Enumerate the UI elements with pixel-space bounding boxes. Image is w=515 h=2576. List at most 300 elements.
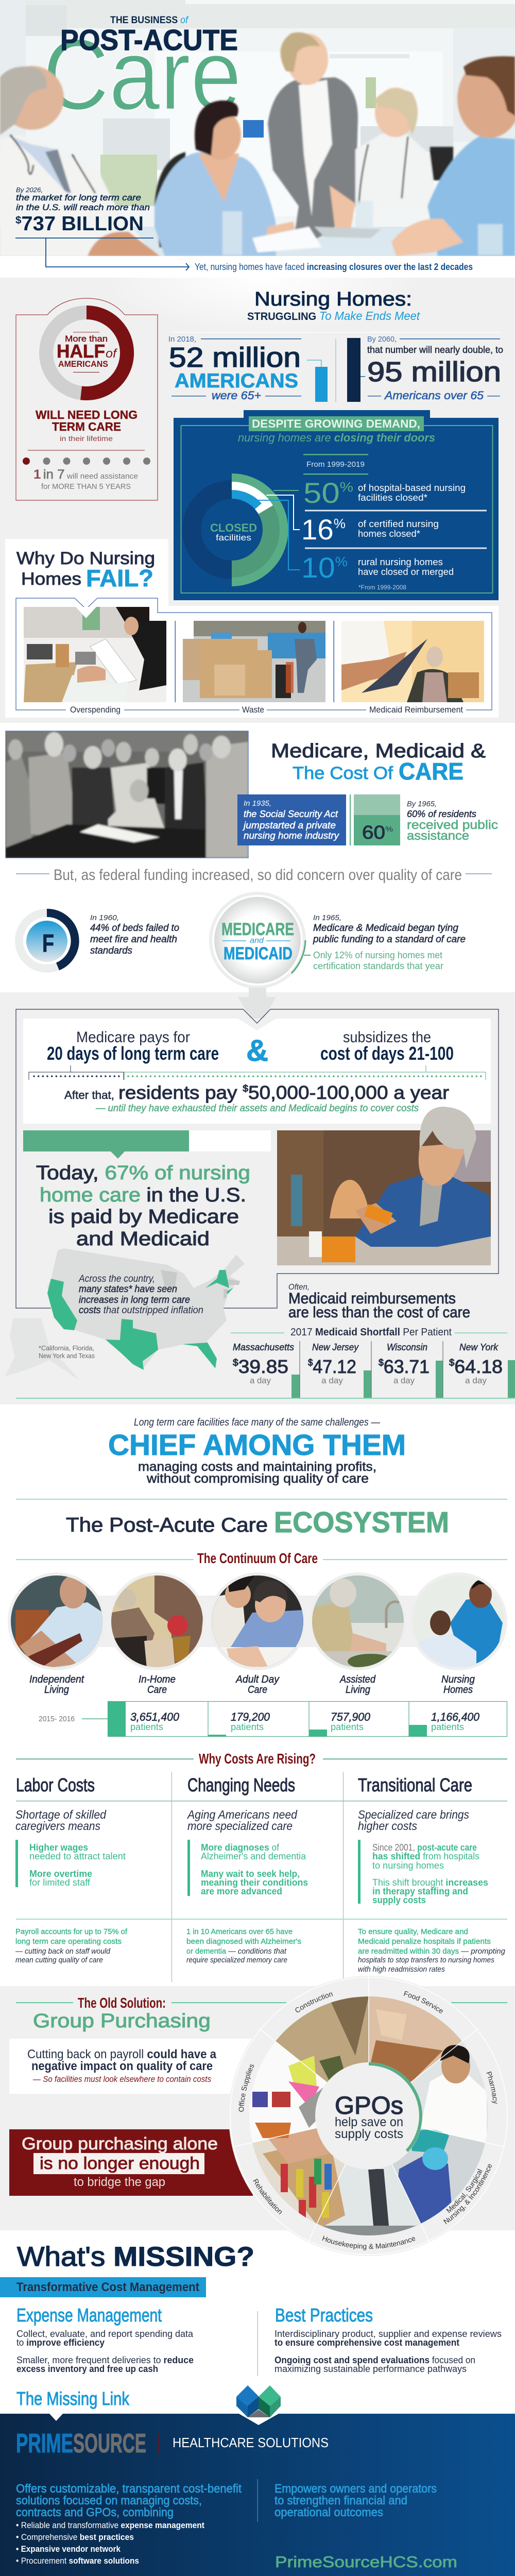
text: 1960 beds failed: meet fire and health bbox=[90, 934, 177, 945]
column: expense management: Expense Management bbox=[16, 2304, 162, 2326]
heading: why fail: Why Do Nursing bbox=[16, 549, 155, 568]
panel background and frame bbox=[174, 410, 499, 600]
frame line with callout notch bbox=[16, 598, 492, 710]
column: transitional care: This shift brought increases bbox=[372, 1877, 488, 1888]
column: expense management: to improve efficiency bbox=[16, 2337, 105, 2348]
Massachusetts: 39.85 bbox=[238, 1356, 288, 1377]
stat: 52 million in 2018: AMERICANS bbox=[175, 370, 298, 392]
column: changing needs: or dementia — conditions that bbox=[186, 1947, 287, 1956]
column: labor costs: caregivers means bbox=[15, 1819, 100, 1833]
column: changing needs: more specialized care bbox=[187, 1819, 293, 1833]
heading: why costs are rising: Why Costs Are Rising? bbox=[199, 1751, 316, 1767]
banner: despite growing demand bbox=[238, 416, 435, 446]
badge: Medicare and Medicaid: MEDICAID bbox=[224, 944, 293, 963]
text: 1960 beds failed: In 1960, bbox=[90, 913, 119, 922]
text: 20 days: Medicare pays for bbox=[76, 1029, 190, 1046]
labels: Overspending bbox=[70, 705, 121, 715]
text: 1960 beds failed: 44% of beds failed to bbox=[90, 923, 179, 934]
table: patients 2015-2016: 3,651,400 bbox=[130, 1710, 180, 1723]
text: empowers bbox=[274, 2482, 437, 2519]
wedge labels bbox=[239, 1991, 497, 2250]
stat: 95 million by 2060: By 2060, bbox=[367, 335, 397, 344]
wedge labels: Construction bbox=[296, 1993, 333, 2012]
column: best practices: maximizing sustainable performance pathways bbox=[274, 2364, 467, 2374]
list: offerings bbox=[16, 2520, 204, 2566]
photo: waste bbox=[183, 621, 325, 702]
text: costs outstripped inflation: Across the country, bbox=[78, 1274, 155, 1284]
text: empowers: operational outcomes bbox=[274, 2505, 383, 2519]
banner: despite growing demand: nursing homes are closing their doors bbox=[238, 431, 435, 444]
chart: 60 percent bar bbox=[350, 794, 400, 845]
wedge labels: Housekeeping & Maintenance bbox=[322, 2236, 415, 2250]
text: 20 days: 20 days of long term care bbox=[47, 1043, 219, 1064]
footnote: states: New York and Texas bbox=[39, 1352, 95, 1360]
column: changing needs: require specialized memory care bbox=[186, 1956, 287, 1964]
column: transitional care bbox=[358, 1774, 506, 1974]
panel: why do nursing homes fail bbox=[5, 539, 499, 718]
heading: Nursing Homes struggling: STRUGGLING To Make Ends Meet bbox=[247, 309, 421, 323]
heading: why fail bbox=[16, 549, 155, 591]
icon: F grade gauge: F bbox=[42, 930, 54, 957]
text: residents pay: residents pay bbox=[118, 1082, 229, 1103]
heading: Medicare, Medicaid and the cost of care: The Cost Of bbox=[293, 764, 393, 783]
text: will need long term care: WILL NEED LONG bbox=[36, 408, 138, 421]
stat: 50 percent: 50 bbox=[303, 477, 335, 509]
New York: New York bbox=[459, 1342, 499, 1352]
logo: PrimeSource wordmark: PRIME bbox=[16, 2429, 73, 2459]
circle photo: in-home care bbox=[108, 1572, 206, 1670]
text: Medicaid reimbursements bbox=[288, 1283, 470, 1321]
text: will need long term care: in their lifetime bbox=[60, 434, 113, 443]
circle photo: independent living bbox=[8, 1572, 106, 1670]
radial chart: closed facilities bbox=[182, 473, 300, 586]
column: expense management: Smaller, more frequent deliveries to reduce bbox=[16, 2355, 194, 2365]
stat: 10 percent: have closed or merged bbox=[358, 567, 454, 577]
chart: 67 percent bar bbox=[23, 1130, 271, 1159]
column: changing needs: are more advanced bbox=[201, 1886, 282, 1896]
chart: 60 percent bar: % bbox=[385, 825, 393, 834]
panel: half of Americans bbox=[16, 298, 158, 500]
text: will need long term care bbox=[28, 408, 145, 451]
column: transitional care: has shifted from hospitals bbox=[372, 1851, 479, 1861]
text: 20 days bbox=[47, 1029, 219, 1064]
text: empowers: Empowers owners and operators bbox=[274, 2482, 437, 2495]
table: patients 2015-2016: 2015- 2016 bbox=[39, 1715, 75, 1723]
grey section background: cost of long term care bbox=[0, 992, 515, 1404]
panel frame bbox=[16, 298, 158, 500]
text: 1965 standards of care: Only 12% of nursing homes met bbox=[313, 950, 442, 960]
text: 60 percent public assistance bbox=[407, 800, 498, 843]
text: 1965 standards of care bbox=[313, 913, 466, 971]
table: patients 2015-2016: patients bbox=[130, 1722, 163, 1732]
heading: 67 percent: Today, 67% of nursing bbox=[36, 1162, 250, 1184]
column: transitional care: Since 2001, post-acute care bbox=[372, 1842, 477, 1853]
New Jersey: New Jersey bbox=[312, 1342, 359, 1352]
circle labels: Nursing bbox=[441, 1674, 475, 1685]
column: transitional care: supply costs bbox=[372, 1895, 426, 1905]
column: transitional care: hospitals to stop transfers to nursing homes bbox=[358, 1956, 494, 1964]
heading: chief among them: without compromising quality of care bbox=[146, 1471, 369, 1486]
photo: 1935 Social Security Act signing bbox=[6, 731, 248, 858]
logo: PrimeSource wordmark: SOURCE bbox=[73, 2429, 146, 2459]
stat: 95 million by 2060 bbox=[367, 335, 503, 402]
center circle: GPOs: supply costs bbox=[335, 2127, 403, 2141]
stat: 16 percent: 16 bbox=[301, 513, 333, 546]
column: changing needs bbox=[186, 1774, 308, 1964]
heading: post-acute care ecosystem bbox=[66, 1506, 449, 1539]
column: labor costs: Labor Costs bbox=[16, 1774, 95, 1795]
heading: why fail: Homes bbox=[21, 569, 81, 589]
column: changing needs: 1 in 10 Americans over 65 have bbox=[186, 1927, 293, 1936]
text: offers: Offers customizable, transparent cost-benefit bbox=[16, 2482, 242, 2495]
heading: continuum of care: The Continuum Of Care bbox=[197, 1550, 318, 1566]
text: 1965 standards of care: Medicare & Medicaid began tying bbox=[313, 923, 458, 934]
heading: Nursing Homes struggling: Nursing Homes: bbox=[254, 289, 412, 310]
column: labor costs: — cutting back on staff would bbox=[15, 1947, 111, 1956]
wheel: GPO categories bbox=[229, 1976, 508, 2256]
text: 60 percent public assistance: By 1965, bbox=[407, 800, 437, 808]
heading: chief among them: CHIEF AMONG THEM bbox=[108, 1429, 406, 1462]
stat: 10 percent: % bbox=[335, 554, 348, 569]
column: best practices: Ongoing cost and spend evaluations focused on bbox=[274, 2355, 475, 2365]
labels: Medicaid Reimbursement bbox=[369, 705, 463, 715]
heading: why fail: FAIL? bbox=[86, 565, 153, 591]
text: 1965 standards of care: certification standards that year bbox=[313, 961, 443, 971]
column: labor costs: mean cutting quality of care bbox=[15, 1956, 103, 1964]
text: will need long term care: TERM CARE bbox=[52, 420, 121, 433]
photo: senior with medication bbox=[277, 1107, 491, 1265]
circle labels: Assisted bbox=[339, 1674, 376, 1685]
column: changing needs: been diagnosed with Alzheimer's bbox=[186, 1937, 301, 1946]
circle labels: Homes bbox=[443, 1684, 473, 1696]
column: labor costs: Higher wages bbox=[29, 1842, 88, 1853]
column: transitional care: Medicaid penalize hospitals if patients bbox=[358, 1937, 491, 1946]
bar chart: Medicaid shortfall per patient: 2017 Medicaid Shortfall Per Patient bbox=[290, 1327, 452, 1338]
donut chart: more than half: of bbox=[106, 347, 117, 361]
heading: post-acute care ecosystem: The Post-Acute Care bbox=[66, 1514, 268, 1536]
column: transitional care: with high readmission rates bbox=[358, 1965, 445, 1974]
banner: despite growing demand: DESPITE GROWING DEMAND, bbox=[252, 417, 420, 430]
column: transitional care: are readmitted within 30 days — prompting bbox=[358, 1947, 506, 1956]
badge: Medicare and Medicaid bbox=[209, 892, 311, 989]
Massachusetts: $ bbox=[233, 1358, 238, 1368]
center circle: GPOs: GPOs bbox=[335, 2092, 403, 2120]
text: 60 percent public assistance: 60% of residents bbox=[407, 809, 476, 819]
heading: 67 percent: and Medicaid bbox=[76, 1228, 210, 1250]
stat: 16 percent: homes closed* bbox=[358, 529, 420, 539]
table lines bbox=[16, 1772, 507, 1982]
text: empowers: to strengthen financial and bbox=[274, 2494, 407, 2507]
title: POST-ACUTE bbox=[60, 24, 238, 57]
table: patients 2015-2016: patients bbox=[231, 1722, 264, 1732]
text: 1 in 7: for MORE THAN 5 YEARS bbox=[41, 482, 131, 491]
column: expense management: Collect, evaluate, and report spending data bbox=[16, 2329, 194, 2339]
Wisconsin: 63.71 bbox=[384, 1356, 430, 1377]
New York: a day bbox=[465, 1376, 487, 1385]
Wisconsin: Wisconsin bbox=[387, 1342, 427, 1352]
hero photo: care team meeting bbox=[0, 0, 515, 256]
column: best practices bbox=[274, 2304, 502, 2374]
heading: old solution: Group Purchasing bbox=[33, 2010, 211, 2032]
heading: 67 percent: home care in the U.S. bbox=[40, 1184, 246, 1206]
column: labor costs: needed to attract talent bbox=[29, 1851, 126, 1861]
text: 1960 beds failed bbox=[90, 913, 179, 956]
table: patients 2015-2016 bbox=[39, 1701, 507, 1737]
text: residents pay bbox=[64, 1082, 449, 1114]
column: changing needs: Alzheimer's and dementia bbox=[201, 1851, 306, 1861]
callout: group purchasing alone: to bridge the gap bbox=[74, 2175, 165, 2189]
text: 1 in 7 bbox=[33, 467, 138, 491]
text: costs outstripped inflation: many states* have seen bbox=[79, 1284, 177, 1295]
heading: Nursing Homes struggling bbox=[171, 289, 501, 333]
photo: medicaid reimbursement bbox=[341, 621, 484, 702]
circle photo: nursing homes bbox=[409, 1572, 507, 1670]
logo: PrimeSource wordmark: HEALTHCARE SOLUTIONS bbox=[173, 2435, 329, 2450]
heading: chief among them: Long term care facilities face many of the same challenges — bbox=[134, 1417, 381, 1428]
text: offers: solutions focused on managing costs, bbox=[16, 2494, 202, 2507]
heading: Medicare, Medicaid and the cost of care: CARE bbox=[399, 758, 464, 785]
circle labels: Adult Day bbox=[235, 1674, 280, 1685]
link: website: PrimeSourceHCS.com bbox=[275, 2553, 457, 2571]
list: offerings: • Reliable and transformative expense management bbox=[16, 2520, 204, 2530]
Massachusetts bbox=[233, 1342, 294, 1385]
stat: 52 million in 2018: 52 million bbox=[169, 342, 301, 373]
heading: Medicare, Medicaid and the cost of care bbox=[271, 740, 486, 785]
circle labels: Living bbox=[44, 1684, 69, 1696]
heading: 67 percent: is paid by Medicare bbox=[48, 1206, 239, 1228]
text: costs outstripped inflation bbox=[78, 1274, 203, 1316]
circle photo: assisted living bbox=[309, 1572, 407, 1670]
column: labor costs: for limited staff bbox=[29, 1877, 91, 1888]
bar chart: Medicaid shortfall per patient bbox=[16, 1327, 515, 1399]
hero photo: people bbox=[0, 32, 515, 256]
labels: Waste bbox=[242, 705, 264, 715]
column: changing needs: Changing Needs bbox=[187, 1774, 295, 1795]
center circle: GPOs: help save on bbox=[335, 2115, 403, 2129]
stat: 52 million in 2018 bbox=[168, 335, 301, 402]
text: 60 percent public assistance: assistance bbox=[407, 829, 469, 843]
callout: 1935 social security: the Social Security Act bbox=[244, 809, 338, 819]
title: THE BUSINESS of bbox=[110, 15, 189, 26]
chart: 60 percent bar: 60 bbox=[362, 822, 383, 843]
donut chart: more than half: More than bbox=[65, 334, 108, 344]
stat: 10 percent: rural nursing homes bbox=[358, 557, 443, 567]
column: transitional care: to nursing homes bbox=[372, 1860, 444, 1871]
heading: old solution bbox=[16, 1995, 507, 2032]
stat: 16 percent bbox=[301, 513, 487, 549]
column: expense management: excess inventory and free up cash bbox=[16, 2364, 158, 2374]
Wisconsin bbox=[379, 1342, 430, 1385]
table: patients 2015-2016: 1,166,400 bbox=[431, 1710, 480, 1723]
stat: 16 percent: % bbox=[334, 516, 346, 531]
wedge labels: Nursing, & Incontinence bbox=[443, 2164, 492, 2225]
hero panel bbox=[0, 0, 515, 256]
heading: post-acute care ecosystem: ECOSYSTEM bbox=[274, 1506, 449, 1539]
donut chart: more than half bbox=[39, 306, 134, 400]
arrow: down from badge bbox=[238, 988, 276, 1030]
pictogram: 1 in 7 dots bbox=[23, 457, 150, 465]
grey section background bbox=[0, 278, 515, 723]
column: transitional care: Specialized care brings bbox=[358, 1808, 469, 1821]
stat: 52 million in 2018: were 65+ bbox=[212, 389, 261, 402]
callout: group purchasing alone bbox=[9, 2129, 253, 2196]
text: 1965 standards of care: public funding to a standard of care bbox=[313, 934, 466, 945]
wedge labels: Office Supplies bbox=[239, 2064, 254, 2112]
wedge labels: Medical, Surgical bbox=[446, 2168, 482, 2213]
column: expense management bbox=[16, 2304, 194, 2374]
callout: 1935 social security bbox=[237, 794, 346, 845]
stat: 10 percent: 10 bbox=[301, 551, 333, 584]
column: transitional care: in therapy staffing and bbox=[372, 1886, 468, 1896]
timeline: 100 day dots bbox=[29, 1065, 486, 1080]
wedge dividers bbox=[232, 1976, 505, 2242]
market stat text: By 2026, bbox=[16, 186, 43, 194]
text: residents pay: — until they have exhausted their assets and Medicaid begins to cover costs bbox=[95, 1103, 419, 1114]
callout: payroll: — So facilities must look elsewhere to contain costs bbox=[32, 2075, 211, 2084]
wedge labels: Rehabilitation bbox=[253, 2178, 282, 2214]
market stat text bbox=[15, 186, 150, 235]
Wisconsin: a day bbox=[393, 1376, 415, 1385]
grey section background: group purchasing bbox=[0, 1986, 515, 2230]
footnote: states: *California, Florida, bbox=[39, 1344, 94, 1352]
stat: 50 percent: of hospital-based nursing bbox=[358, 483, 466, 493]
stat: 52 million in 2018: In 2018, bbox=[168, 335, 196, 344]
column: changing needs: Many wait to seek help, bbox=[201, 1869, 300, 1879]
callout: 1935 social security: jumpstarted a private bbox=[242, 820, 336, 831]
heading: Medicare, Medicaid and the cost of care: Medicare, Medicaid & bbox=[271, 740, 486, 762]
map: US states bbox=[5, 1248, 245, 1380]
list: offerings: • Comprehensive best practices bbox=[16, 2532, 134, 2542]
column: labor costs: Shortage of skilled bbox=[15, 1808, 107, 1821]
market stat text: the market for long term care bbox=[16, 193, 141, 202]
text: days 21-100: subsidizes the bbox=[343, 1029, 431, 1046]
circle labels: In-Home bbox=[139, 1674, 176, 1685]
donut chart: more than half: AMERICANS bbox=[58, 359, 108, 369]
heading: old solution: The Old Solution: bbox=[78, 1995, 166, 2011]
banner: transformative cost management: Transformative Cost Management bbox=[16, 2280, 199, 2294]
New York bbox=[449, 1342, 503, 1385]
table: patients 2015-2016: patients bbox=[331, 1722, 364, 1732]
big word: Care: Care bbox=[43, 19, 242, 131]
text: Medicaid reimbursements: Often, bbox=[288, 1283, 310, 1292]
icon: F grade gauge bbox=[19, 913, 75, 969]
callout: 1935 social security: In 1935, bbox=[244, 799, 271, 808]
donut chart: more than half: HALF bbox=[57, 341, 105, 362]
Massachusetts: Massachusetts bbox=[233, 1342, 294, 1352]
list: offerings: • Procurement software solutions bbox=[16, 2556, 139, 2566]
callout: payroll bbox=[9, 2039, 253, 2094]
heading: chief among them: managing costs and maintaining profits, bbox=[138, 1460, 376, 1474]
divider statement: quality of care: But, as federal funding increased, so did concern over quality of care bbox=[54, 867, 462, 884]
table: patients 2015-2016: patients bbox=[431, 1722, 464, 1732]
text: costs outstripped inflation: increases in long term care bbox=[79, 1295, 190, 1306]
radial chart: closed facilities: CLOSED bbox=[210, 521, 257, 534]
date range: From 1999-2019 bbox=[306, 460, 365, 469]
New York: $ bbox=[449, 1358, 454, 1368]
column: transitional care: higher costs bbox=[358, 1819, 417, 1833]
text: costs outstripped inflation: costs that outstripped inflation bbox=[79, 1305, 203, 1316]
stat: 16 percent: of certified nursing bbox=[358, 519, 439, 529]
panel: closing their doors bbox=[174, 410, 499, 600]
table: patients 2015-2016: 757,900 bbox=[331, 1710, 371, 1723]
stat: 50 percent bbox=[303, 477, 487, 511]
column: changing needs: Aging Americans need bbox=[186, 1808, 298, 1821]
text: residents pay: 50,000-100,000 a year bbox=[248, 1082, 449, 1103]
heading: 67 percent bbox=[36, 1162, 250, 1250]
Massachusetts: a day bbox=[250, 1376, 271, 1385]
text: days 21-100: cost of days 21-100 bbox=[320, 1043, 454, 1064]
photo: overspending bbox=[24, 607, 166, 702]
table: patients 2015-2016: 179,200 bbox=[231, 1710, 270, 1723]
list: offerings: • Expansive vendor network bbox=[16, 2544, 121, 2554]
Wisconsin: $ bbox=[379, 1358, 384, 1368]
column: changing needs: More diagnoses of bbox=[201, 1842, 280, 1853]
logo: PrimeSource mark bbox=[236, 2385, 281, 2417]
callout: 1935 social security: nursing home industry bbox=[244, 831, 339, 841]
market stat text: 737 BILLION bbox=[21, 213, 144, 235]
New Jersey: a day bbox=[321, 1376, 343, 1385]
column: best practices: Best Practices bbox=[275, 2304, 373, 2326]
text: 1 in 7: 1 in 7 will need assistance bbox=[33, 467, 138, 482]
stat: 10 percent bbox=[301, 551, 454, 591]
logo: PrimeSource wordmark bbox=[16, 2429, 329, 2459]
panel: Medicare days bbox=[5, 1009, 499, 1380]
text: 1965 standards of care: In 1965, bbox=[313, 913, 341, 922]
column: transitional care: Transitional Care bbox=[358, 1774, 472, 1795]
heading: chief among them bbox=[16, 1417, 507, 1500]
badge: Medicare and Medicaid: and bbox=[250, 936, 264, 945]
arrow: closures connector bbox=[15, 238, 189, 270]
market stat text: in the U.S. will reach more than bbox=[16, 202, 150, 212]
stat: 95 million by 2060: Americans over 65 bbox=[384, 389, 484, 402]
callout: payroll: Cutting back on payroll could have a bbox=[27, 2047, 217, 2061]
bar chart: population growth bbox=[307, 338, 365, 402]
callout: payroll: negative impact on quality of care bbox=[31, 2059, 213, 2073]
text: days 21-100 bbox=[320, 1029, 454, 1064]
stat: 10 percent: *From 1999-2008 bbox=[358, 584, 406, 591]
text: residents pay: $ bbox=[243, 1083, 248, 1094]
panel: PrimeSource bbox=[0, 2385, 515, 2576]
stat: 95 million by 2060: that number will nearly double, to bbox=[367, 345, 503, 355]
column: labor costs bbox=[15, 1774, 128, 1964]
text: Medicaid reimbursements: Medicaid reimbursements bbox=[288, 1290, 456, 1307]
text: 60 percent public assistance: received public bbox=[407, 818, 498, 832]
date range bbox=[303, 454, 368, 475]
wedge labels: Food Service bbox=[404, 1991, 443, 2013]
column: labor costs: Payroll accounts for up to 75% of bbox=[15, 1927, 128, 1936]
ampersand: & bbox=[246, 1034, 268, 1067]
text: 1960 beds failed: standards bbox=[90, 945, 132, 956]
center circle: GPOs bbox=[315, 2062, 422, 2170]
wedge labels: Pharmacy bbox=[486, 2071, 497, 2104]
banner: transformative cost management bbox=[0, 2277, 206, 2297]
heading: the missing link: The Missing Link bbox=[16, 2388, 130, 2409]
text: offers: contracts and GPOs, combining bbox=[16, 2505, 174, 2519]
labels bbox=[70, 705, 463, 715]
circle labels: Care bbox=[248, 1684, 267, 1696]
heading: what's missing: What's MISSING? bbox=[17, 2242, 254, 2272]
frame line bbox=[16, 1009, 499, 1308]
callout: group purchasing alone: Group purchasing alone bbox=[22, 2134, 218, 2153]
footnote: states bbox=[39, 1344, 95, 1360]
circle labels bbox=[29, 1674, 475, 1696]
circle labels: Independent bbox=[29, 1674, 84, 1685]
New Jersey: $ bbox=[308, 1358, 313, 1368]
text: residents pay: After that, bbox=[64, 1089, 114, 1101]
column: best practices: Interdisciplinary product, supplier and expense reviews bbox=[274, 2329, 502, 2339]
text: Medicaid reimbursements: are less than the cost of care bbox=[288, 1304, 470, 1321]
circle labels: Living bbox=[346, 1684, 370, 1696]
